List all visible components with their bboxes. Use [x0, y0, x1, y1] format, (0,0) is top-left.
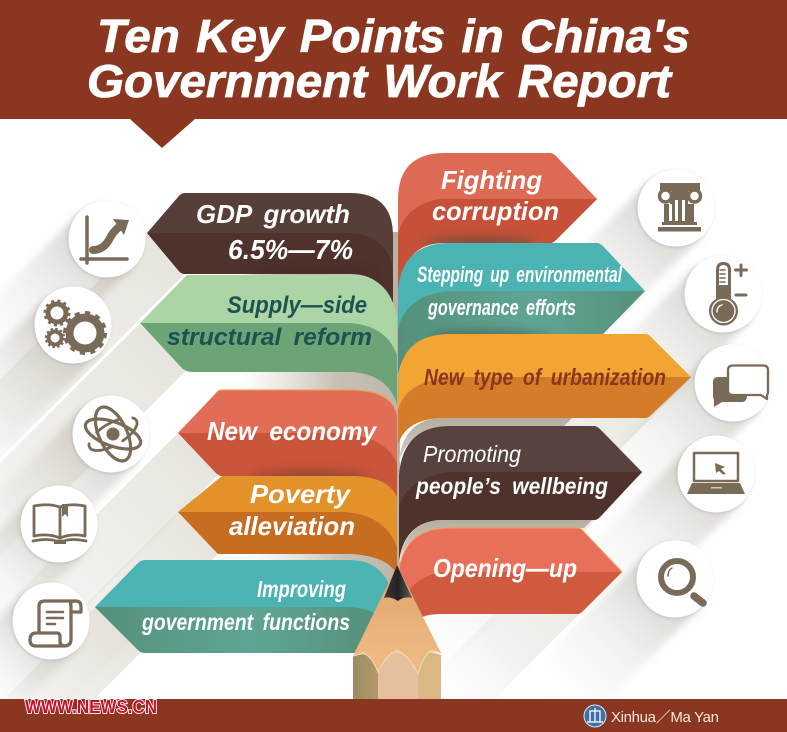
ribbon: environmental governance: governance efforts — [427, 295, 576, 320]
ribbon: fighting corruption: corruption — [432, 196, 559, 226]
ribbon: new type of urbanization — [398, 334, 691, 445]
ribbon: GDP growth: GDP growth — [196, 199, 350, 229]
shadow under environmental ribbon — [430, 331, 550, 341]
ribbon: new economy: New economy — [207, 416, 377, 446]
footer banner — [0, 699, 787, 732]
icon: pillar circle — [638, 170, 714, 246]
icon: atom circle — [72, 396, 150, 472]
icon: thermometer circle — [684, 256, 762, 332]
ribbon: GDP growth — [147, 193, 393, 310]
ribbon: poverty alleviation — [178, 476, 397, 575]
ribbon: poverty alleviation: alleviation — [229, 511, 355, 541]
ribbon: promoting people's wellbeing: Promoting — [423, 441, 521, 467]
ribbon: promoting people's wellbeing: people’s wellbeing — [415, 473, 608, 499]
ribbon: supply-side structural reform — [140, 275, 397, 405]
shadow under wellbeing ribbon — [398, 520, 592, 570]
ribbon: opening-up — [399, 528, 622, 622]
shadow under fighting ribbon — [425, 238, 535, 248]
shadow under GDP ribbon — [245, 268, 375, 280]
ribbon: promoting people's wellbeing — [399, 426, 642, 560]
ribbon: poverty alleviation: Poverty — [250, 479, 352, 509]
icon: chart circle — [68, 200, 146, 278]
circle long shadows — [0, 181, 760, 726]
ribbon: GDP growth: 6.5%—7% — [228, 234, 353, 265]
ribbon: supply-side structural reform: structural reform — [167, 324, 372, 351]
icon: book circle — [20, 486, 98, 562]
ribbon: improving government functions — [95, 560, 392, 653]
ribbon: improving government functions: Improving — [257, 576, 346, 602]
website label: WWW.NEWS.CN — [25, 697, 157, 717]
shadow under new economy ribbon — [250, 471, 370, 481]
ribbon: new economy — [178, 390, 397, 500]
ribbon: fighting corruption — [398, 153, 597, 290]
ribbon: new type of urbanization: New type of urbanization — [424, 364, 666, 390]
ribbon: supply-side structural reform: Supply—side — [227, 292, 367, 319]
icon: scroll circle — [12, 582, 90, 660]
header banner — [0, 0, 787, 148]
logo: Xinhua — [584, 705, 606, 727]
gap shadow above new economy — [240, 372, 397, 425]
icon: magnifier circle — [636, 540, 714, 618]
ribbon long shadows — [0, 233, 692, 732]
shadow under urbanization ribbon — [398, 418, 572, 470]
ribbon: environmental governance — [398, 243, 645, 375]
pencil — [353, 565, 441, 699]
gap shadow above improving — [250, 554, 397, 596]
ribbon: opening-up: Opening—up — [433, 553, 577, 583]
ribbon: improving government functions: government functions — [141, 609, 350, 635]
ribbon: environmental governance: Stepping up environmental — [417, 262, 623, 287]
credit: Xinhua／Ma Yan — [611, 709, 719, 726]
icon: gears circle — [34, 286, 112, 364]
icon: chat circle — [694, 344, 772, 422]
title: Government Work Report — [87, 55, 673, 107]
title: Ten Key Points in China's — [97, 10, 690, 62]
centre post — [390, 232, 400, 572]
ribbon: fighting corruption: Fighting — [441, 165, 542, 195]
title — [87, 10, 690, 107]
icon: laptop circle — [678, 436, 754, 512]
